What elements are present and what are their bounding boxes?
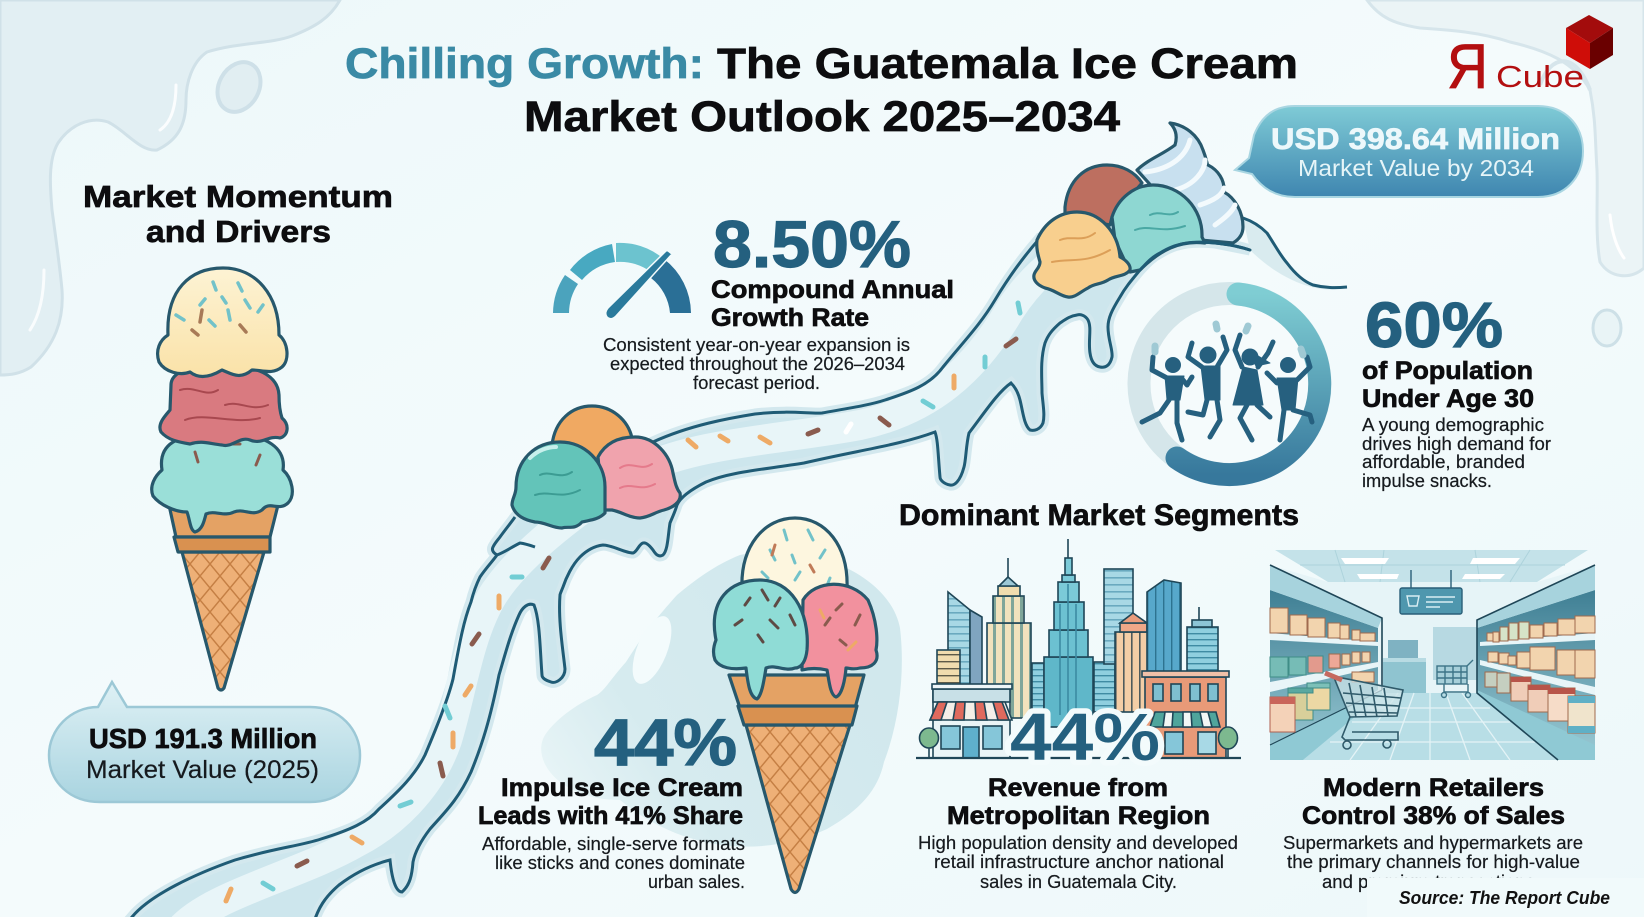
- icon: scoops on lower stream: [512, 406, 680, 528]
- stat: CAGR: forecast period.: [693, 373, 820, 393]
- icon: dancing young people: [1142, 324, 1312, 440]
- stat: impulse ice cream: Affordable, single-serve formats: [482, 834, 745, 854]
- icon: gauge: [553, 243, 691, 319]
- callout: USD 398.64 Million: USD 398.64 Million: [1271, 123, 1560, 156]
- sign: [1400, 570, 1462, 614]
- floor: [1303, 693, 1558, 760]
- small background cart: [1437, 660, 1473, 698]
- right shelves: [1477, 565, 1595, 760]
- text: metropolitan region: retail infrastructure anchor national: [934, 852, 1224, 872]
- stat: impulse ice cream: urban sales.: [648, 872, 745, 892]
- teal scoop: [713, 580, 807, 699]
- stat: impulse ice cream: 44%: [594, 705, 737, 779]
- stat: impulse ice cream: like sticks and cones dominate: [495, 853, 745, 873]
- hill tail on the right of the stream: [1160, 218, 1347, 289]
- pale backdrop blob behind big cone: [541, 552, 902, 847]
- stat: CAGR: expected throughout the 2026–2034: [610, 354, 905, 374]
- heading: market momentum: [83, 179, 393, 249]
- callout: USD 191.3 Million: USD 191.3 Million: [89, 723, 317, 754]
- stat: CAGR: 8.50%: [713, 207, 911, 281]
- trees: [920, 727, 1238, 758]
- back counter and shelf: [1383, 627, 1477, 693]
- source note: Source: The Report Cube: [1399, 888, 1610, 908]
- title: Chilling Growth:: [345, 40, 704, 88]
- left storefront: [930, 684, 1012, 758]
- top-left melting blob: [0, 0, 340, 375]
- callout: USD 398.64 Million: [1235, 106, 1583, 197]
- source note: [1367, 878, 1644, 917]
- stat: impulse ice cream: Impulse Ice Cream: [501, 774, 743, 802]
- stat: population under 30: 60%: [1365, 289, 1503, 361]
- stat: CAGR: Consistent year-on-year expansion is: [603, 335, 910, 355]
- callout: USD 191.3 Million: [49, 682, 360, 802]
- stat: population under 30: impulse snacks.: [1362, 471, 1492, 491]
- title: [345, 40, 1298, 141]
- stat: population under 30: drives high demand for: [1362, 434, 1551, 454]
- heading: dominant market segments: Dominant Market Segments: [899, 499, 1299, 532]
- text: metropolitan region: sales in Guatemala City.: [980, 872, 1177, 892]
- logo: RCube: [1447, 15, 1613, 102]
- pink scoop: [802, 584, 877, 697]
- text: metropolitan region: Metropolitan Region: [947, 802, 1210, 830]
- icon: scoops and swirl at top of stream: [1034, 123, 1250, 297]
- text: modern retailers: Modern Retailers: [1323, 774, 1544, 802]
- icon: city skyline: [916, 539, 1241, 758]
- logo: RCube: Я: [1447, 32, 1488, 102]
- top-right melting blob: [1367, 0, 1644, 346]
- text: modern retailers: Control 38% of Sales: [1302, 802, 1565, 830]
- right storefront: [1142, 671, 1229, 758]
- icon: three-scoop cone: [152, 268, 292, 690]
- stat: CAGR: [603, 207, 954, 393]
- melting ice cream stream: [125, 218, 1347, 924]
- stat: impulse ice cream: [478, 705, 745, 892]
- stat: impulse ice cream: Leads with 41% Share: [478, 802, 743, 830]
- stat: population under 30: affordable, branded: [1362, 452, 1525, 472]
- text: modern retailers: the primary channels for high-value: [1287, 852, 1580, 872]
- stat: population under 30: [1362, 289, 1551, 491]
- left shelves: [1270, 565, 1382, 760]
- text: modern retailers: [1283, 774, 1583, 892]
- text: modern retailers: and premium transactions.: [1322, 872, 1540, 892]
- pink scoop: [160, 365, 287, 445]
- cone: [169, 505, 278, 690]
- stat: CAGR: Growth Rate: [711, 304, 869, 332]
- callout: USD 191.3 Million: Market Value (2025): [86, 756, 319, 784]
- cream scoop: [158, 268, 287, 376]
- heading: market momentum: Market Momentum: [83, 179, 393, 214]
- text: metropolitan region: Revenue from: [988, 774, 1168, 802]
- shopping cart: [1325, 673, 1403, 749]
- ceiling and back wall: [1270, 550, 1595, 760]
- teal scoop: [152, 433, 292, 532]
- icon: big three-scoop cone: [713, 518, 877, 892]
- title: Market Outlook 2025–2034: [524, 93, 1120, 141]
- cream scoop: [742, 518, 847, 650]
- cone: [729, 675, 864, 892]
- logo: RCube: Cube: [1496, 59, 1584, 94]
- sprinkles on the stream: [226, 303, 1020, 901]
- white bottom strip: [0, 917, 1644, 924]
- stat: population under 30: A young demographic: [1362, 415, 1544, 435]
- heading: market momentum: and Drivers: [146, 214, 331, 249]
- chart: 60% population ring: [1139, 294, 1320, 475]
- stat: population under 30: of Population: [1362, 357, 1533, 385]
- icon: supermarket aisle: [1270, 550, 1595, 760]
- stat: population under 30: Under Age 30: [1362, 385, 1534, 413]
- stat: CAGR: Compound Annual: [711, 276, 954, 304]
- text: metropolitan region: High population density and developed: [918, 833, 1238, 853]
- text: metropolitan region: [918, 774, 1238, 892]
- text: modern retailers: Supermarkets and hypermarkets are: [1283, 833, 1583, 853]
- stat: metropolitan 44%: 44%: [1010, 700, 1160, 775]
- callout: USD 398.64 Million: Market Value by 2034: [1298, 155, 1534, 181]
- title: The Guatemala Ice Cream: [717, 40, 1298, 88]
